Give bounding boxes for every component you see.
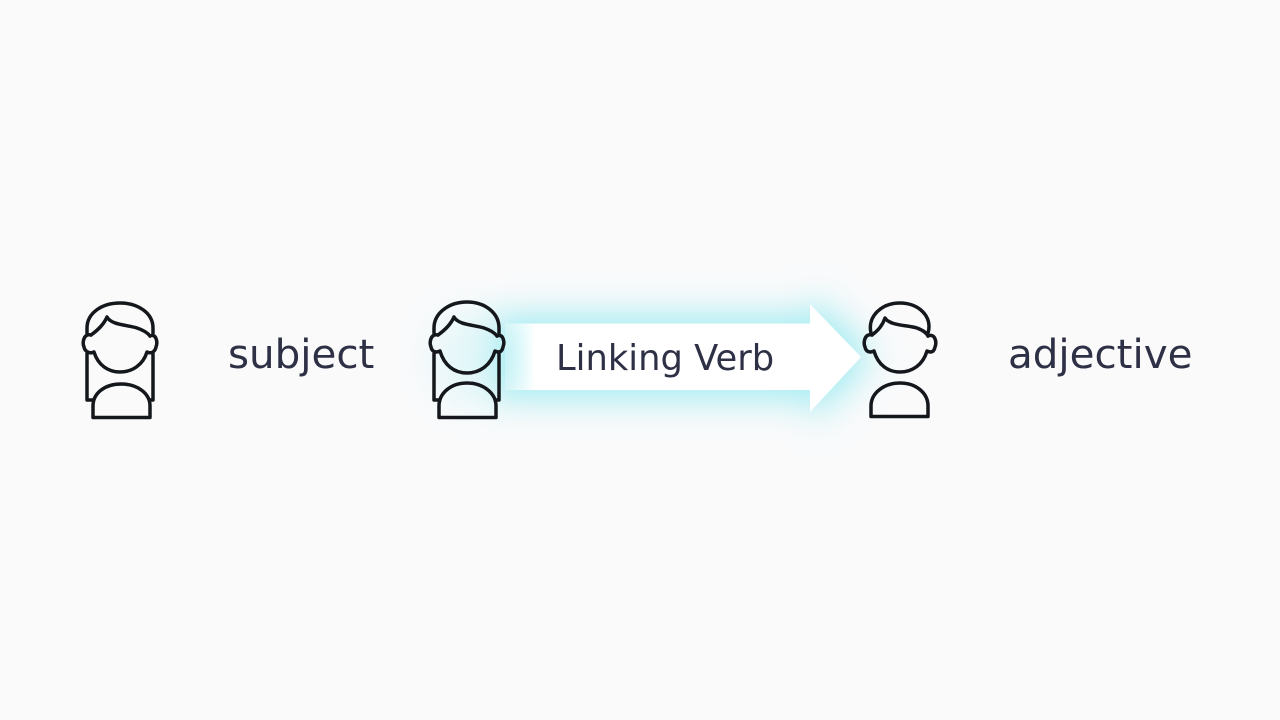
label: Linking Verb: Linking Verb [556,338,774,379]
arrow glow [432,294,872,422]
icon: girl before the arrow [430,302,504,418]
icon: girl subject [83,303,157,418]
arrow: linking verb [505,304,861,412]
icon: boy adjective [864,303,936,416]
label: subject: subject [228,330,374,378]
label: adjective: adjective [1008,330,1192,378]
